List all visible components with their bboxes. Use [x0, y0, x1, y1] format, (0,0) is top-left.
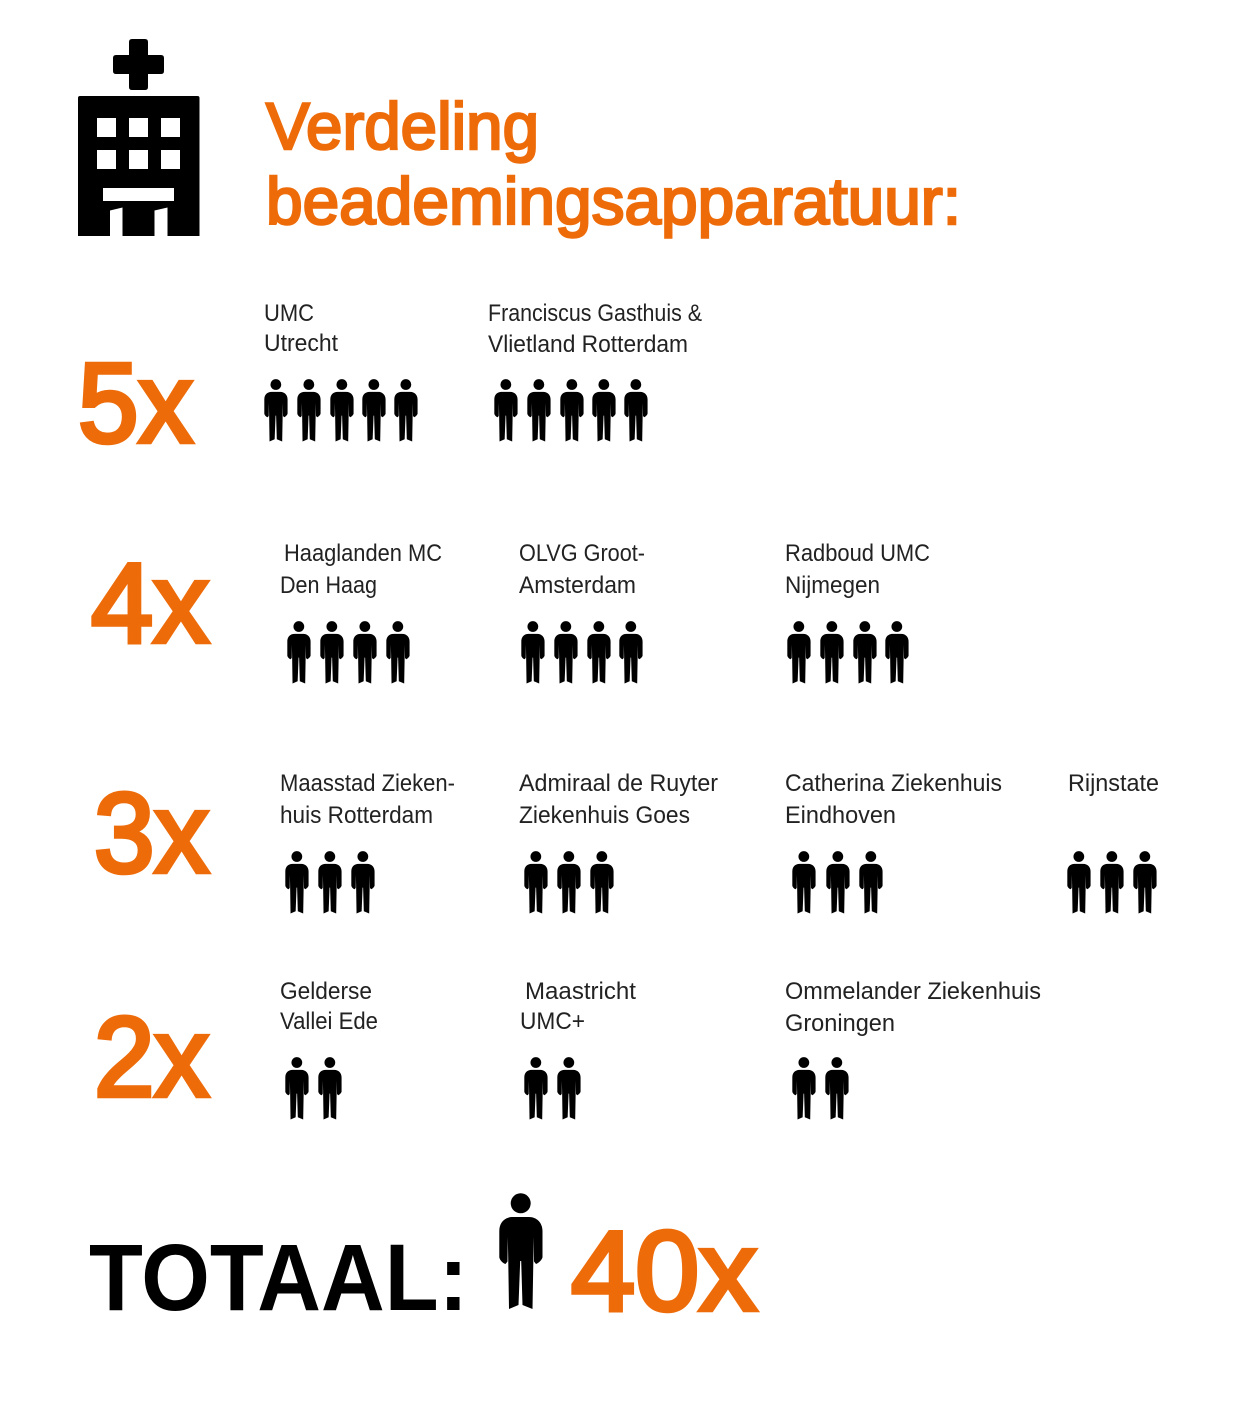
group: UMC Utrecht: UMC: [264, 300, 314, 327]
count: 3x: 3x: [94, 770, 209, 896]
group: UMC Utrecht: [264, 300, 418, 441]
group: Ommelander: Groningen: [785, 1010, 895, 1037]
group: Gelderse Vallei: Gelderse: [280, 978, 372, 1005]
group: Maastricht UMC+: [520, 978, 636, 1119]
group: Maasstad: huis Rotterdam: [280, 802, 433, 829]
group: Franciscus Gasthuis: Franciscus Gasthuis &: [488, 300, 702, 327]
group: Maastricht UMC+: Maastricht: [525, 978, 636, 1005]
total: [89, 1193, 757, 1334]
group: Maastricht UMC+: UMC+: [520, 1008, 585, 1035]
group: Catherina: Catherina Ziekenhuis: [785, 770, 1002, 797]
group: Haaglanden MC: [280, 540, 442, 683]
row: 4x: [91, 540, 930, 683]
group: Ommelander: [785, 978, 1041, 1119]
icon: hospital: [78, 39, 200, 236]
group: Catherina: Eindhoven: [785, 802, 896, 829]
group: Franciscus Gasthuis: Vlietland Rotterdam: [488, 331, 688, 358]
group: Maasstad: Maasstad Zieken-: [280, 770, 455, 797]
total count: 40x: [571, 1208, 757, 1334]
group: OLVG: OLVG Groot-: [519, 540, 645, 567]
group: Admiraal de Ruyter: [519, 770, 718, 913]
group: Radboud UMC: Radboud UMC: [785, 540, 930, 567]
group: Rijnstate: Rijnstate: [1068, 770, 1159, 797]
group: UMC Utrecht: Utrecht: [264, 330, 338, 357]
group: Ommelander: Ommelander Ziekenhuis: [785, 978, 1041, 1005]
group: Admiraal de Ruyter: Admiraal de Ruyter: [519, 770, 718, 797]
group: Admiraal de Ruyter: Ziekenhuis Goes: [519, 802, 690, 829]
group: Gelderse Vallei: Vallei Ede: [280, 1008, 378, 1035]
icon: large person: [499, 1193, 542, 1309]
row: 3x: [94, 770, 1159, 913]
title: beademingsapparatuur:: [266, 164, 961, 238]
group: Catherina: [785, 770, 1002, 913]
group: OLVG: Amsterdam: [519, 572, 636, 599]
group: Gelderse Vallei: [280, 978, 378, 1119]
count: 2x: 2x: [94, 994, 209, 1120]
group: OLVG: [519, 540, 645, 683]
group: Rijnstate: [1067, 770, 1159, 913]
group: Maasstad: [280, 770, 455, 913]
group: Radboud UMC: Nijmegen: [785, 572, 880, 599]
group: Haaglanden MC: Haaglanden MC: [284, 540, 442, 567]
row: 2x: [94, 978, 1041, 1120]
group: Haaglanden MC: Den Haag: [280, 572, 377, 599]
count: 5x: 5x: [78, 340, 193, 466]
total label: TOTAAL:: [89, 1225, 468, 1331]
row: 5x: [78, 300, 702, 466]
group: Franciscus Gasthuis: [488, 300, 702, 441]
count: 4x: 4x: [91, 540, 209, 666]
title: Verdeling: [266, 89, 539, 163]
title: [266, 89, 961, 238]
group: Radboud UMC: [785, 540, 930, 683]
